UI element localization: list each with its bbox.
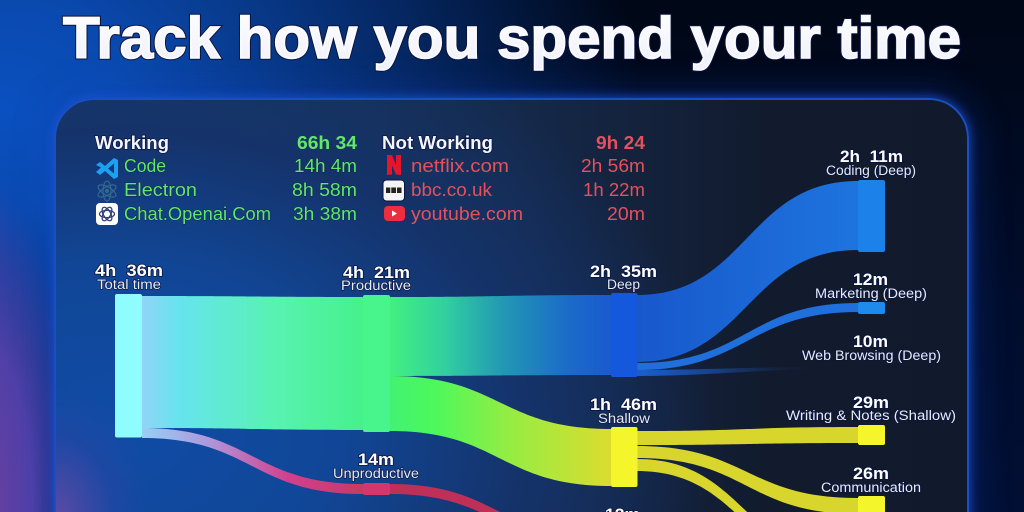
label: deep: 2h 35m bbox=[590, 262, 657, 281]
app: electron: Electron bbox=[124, 180, 197, 200]
time: netflix: 2h 56m bbox=[581, 156, 645, 176]
node: productive bbox=[363, 295, 390, 432]
label: total time: Total time bbox=[97, 277, 161, 292]
label: writing and notes: 29m bbox=[853, 393, 889, 412]
label: writing and notes bbox=[786, 393, 956, 423]
node: shallow bbox=[611, 427, 638, 487]
label: marketing: 12m bbox=[853, 270, 888, 289]
link: shallow to communication bbox=[637, 446, 858, 512]
icon: youtube bbox=[384, 206, 405, 221]
link: shallow to lower category bbox=[637, 459, 858, 512]
panel: working list bbox=[95, 133, 357, 225]
label: writing and notes: Writing & Notes (Shallow) bbox=[786, 408, 956, 423]
node: coding bbox=[858, 180, 885, 252]
label: coding: Coding (Deep) bbox=[826, 163, 916, 178]
label: communication: Communication bbox=[821, 480, 921, 495]
link: unproductive onward bbox=[390, 484, 611, 512]
title: Track how you spend your time bbox=[63, 6, 961, 71]
icon: bbc bbox=[383, 180, 404, 201]
label: shallow: 1h 46m bbox=[590, 395, 657, 414]
site: bbc: bbc.co.uk bbox=[411, 180, 493, 200]
time: bbc: 1h 22m bbox=[583, 180, 645, 200]
icon: openai bbox=[96, 203, 118, 225]
link: deep to web browsing bbox=[637, 367, 815, 376]
icon: electron bbox=[96, 181, 118, 201]
label: productive bbox=[341, 263, 411, 293]
heading: not working: Not Working bbox=[382, 133, 493, 153]
time: youtube: 20m bbox=[607, 204, 645, 224]
label: unproductive: 14m bbox=[358, 450, 394, 469]
label: shallow: Shallow bbox=[598, 411, 650, 426]
label: total time bbox=[95, 261, 163, 292]
label: unproductive bbox=[333, 450, 419, 481]
site: youtube: youtube.com bbox=[411, 204, 523, 224]
time: chat.openai.com: 3h 38m bbox=[293, 204, 357, 224]
label: total time: 4h 36m bbox=[95, 261, 163, 280]
label: productive: Productive bbox=[341, 278, 411, 293]
node: communication bbox=[858, 496, 885, 512]
label: coding: 2h 11m bbox=[840, 147, 903, 166]
node: marketing bbox=[858, 302, 885, 314]
link: productive to deep bbox=[390, 295, 611, 376]
app: code: Code bbox=[124, 156, 166, 176]
total: working: 66h 34 bbox=[297, 133, 357, 153]
icon: code bbox=[96, 158, 118, 179]
label: shallow bbox=[590, 395, 657, 426]
node: deep bbox=[611, 293, 638, 377]
heading: working: Working bbox=[95, 133, 169, 153]
time: electron: 8h 58m bbox=[292, 180, 357, 200]
label: coding bbox=[826, 147, 916, 178]
label: communication bbox=[821, 464, 921, 495]
link: total to productive bbox=[142, 296, 363, 430]
site: netflix: netflix.com bbox=[411, 156, 509, 176]
label: communication: 26m bbox=[853, 464, 889, 483]
label: productive: 4h 21m bbox=[343, 263, 410, 282]
label: unproductive: Unproductive bbox=[333, 466, 419, 481]
label: web browsing bbox=[802, 332, 941, 363]
label: marketing: Marketing (Deep) bbox=[815, 286, 927, 301]
link: shallow to writing bbox=[637, 427, 858, 445]
link: total to unproductive bbox=[142, 428, 363, 494]
label: web browsing: 10m bbox=[853, 332, 888, 351]
title: Track how you spend your time bbox=[63, 6, 961, 71]
app: chat.openai.com: Chat.Openai.Com bbox=[124, 204, 271, 224]
link: productive to shallow bbox=[390, 376, 611, 486]
panel: sankey card bbox=[54, 98, 969, 512]
total: not working: 9h 24 bbox=[596, 133, 645, 153]
node: unproductive bbox=[363, 483, 390, 495]
node: total time bbox=[115, 294, 142, 438]
time: code: 14h 4m bbox=[294, 156, 357, 176]
label: marketing bbox=[815, 270, 927, 301]
label: web browsing: Web Browsing (Deep) bbox=[802, 348, 941, 363]
label: deep bbox=[590, 262, 657, 292]
sankey chart bbox=[115, 180, 885, 512]
link: deep to coding bbox=[637, 181, 858, 362]
panel: not working list bbox=[382, 133, 645, 224]
link: deep to marketing bbox=[637, 303, 858, 370]
node: writing and notes bbox=[858, 425, 885, 445]
label: deep: Deep bbox=[607, 277, 640, 292]
icon: netflix bbox=[387, 155, 401, 175]
